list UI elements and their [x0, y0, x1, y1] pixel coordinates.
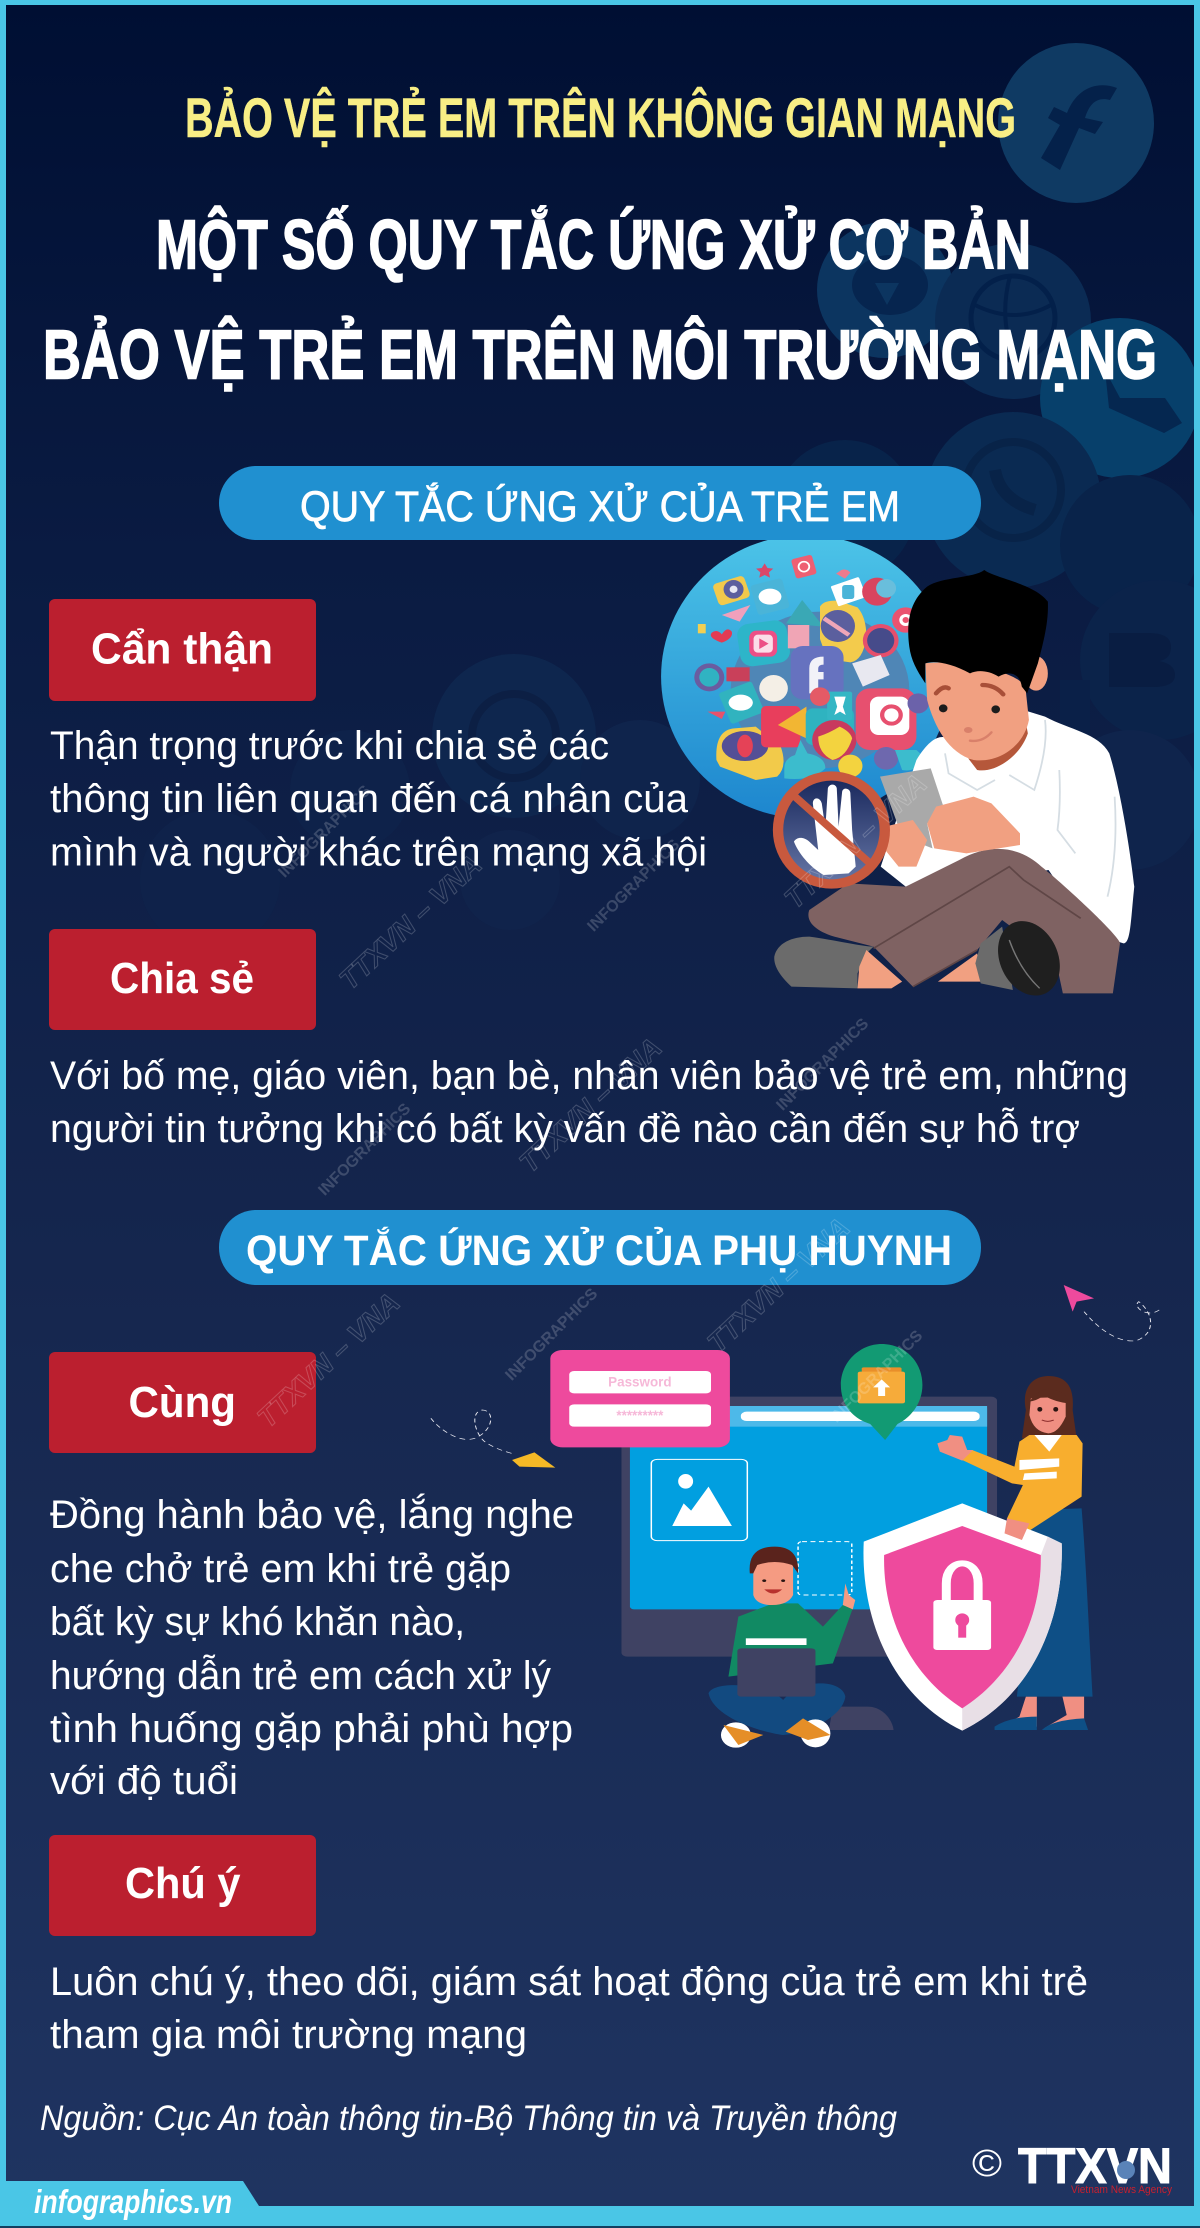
dashed placeholder — [798, 1542, 852, 1595]
label: Cẩn thận — [91, 624, 273, 674]
paper plane: pink — [1064, 1285, 1161, 1341]
password panel — [550, 1350, 730, 1447]
watermarks: TTXVN – VNA — [333, 849, 488, 995]
left shoe — [774, 937, 874, 988]
panel: Chú ý — [49, 1835, 1088, 2057]
background social icons — [432, 43, 1194, 790]
social bubble — [661, 535, 950, 818]
watermarks: INFOGRAPHICS — [315, 1100, 414, 1199]
shirt — [881, 710, 1134, 943]
label — [49, 599, 316, 701]
body text: bất kỳ sự khó khăn nào, — [50, 1600, 465, 1644]
body text — [50, 1054, 1128, 1151]
ear — [1024, 656, 1048, 691]
section pill: parents: QUY TẮC ỨNG XỬ CỦA PHỤ HUYNH — [246, 1226, 952, 1275]
woman — [937, 1376, 1093, 1730]
feet — [857, 950, 982, 988]
paper plane: yellow — [431, 1410, 555, 1468]
watermarks: TTXVN – VNA — [513, 1032, 668, 1178]
label — [49, 1352, 316, 1453]
boy with laptop — [709, 1547, 855, 1748]
hands — [882, 797, 1020, 867]
icon: shield with lock — [863, 1503, 1062, 1731]
body text: che chở trẻ em khi trẻ gặp — [50, 1547, 511, 1591]
label — [49, 929, 316, 1030]
facial features — [936, 685, 1003, 741]
body text — [50, 724, 707, 874]
icon: stop hand — [773, 771, 890, 889]
watermarks: INFOGRAPHICS — [275, 782, 374, 881]
watermarks: INFOGRAPHICS — [584, 836, 683, 935]
label: Chú ý — [125, 1859, 241, 1908]
section pill: parents — [219, 1210, 981, 1285]
footer tab: infographics.vn — [34, 2183, 232, 2220]
watermarks: TTXVN – VNA — [778, 768, 933, 914]
panel: Cẩn thận — [49, 599, 707, 874]
body text: Luôn chú ý, theo dõi, giám sát hoạt động của trẻ em khi trẻ — [50, 1960, 1088, 2004]
phone — [880, 768, 947, 848]
illustration: parent and child with security shield — [431, 1285, 1161, 1748]
body text: hướng dẫn trẻ em cách xử lý — [50, 1653, 551, 1698]
body text: tình huống gặp phải phù hợp — [50, 1707, 573, 1751]
hair — [908, 570, 1048, 693]
watermarks: INFOGRAPHICS — [827, 1327, 926, 1426]
label: Chia sẻ — [110, 954, 254, 1003]
TTXVN logo: TTXVN — [1018, 2138, 1172, 2194]
section pill: children — [219, 466, 981, 540]
body text: với độ tuổi — [50, 1759, 238, 1803]
label — [49, 1835, 316, 1936]
right shoe — [975, 913, 1070, 1004]
body text: mình và người khác trên mạng xã hội — [50, 830, 707, 874]
icon: image frame — [651, 1459, 747, 1541]
shirt folds — [945, 720, 1116, 897]
body text: Đồng hành bảo vệ, lắng nghe — [50, 1492, 574, 1537]
watermarks — [251, 768, 933, 1433]
watermarks: TTXVN – VNA — [251, 1287, 406, 1433]
icon: upload pin — [841, 1344, 922, 1440]
body text — [50, 1960, 1088, 2057]
panel: Cùng — [49, 1352, 574, 1803]
body text — [50, 1492, 574, 1803]
body text: người tin tưởng khi có bất kỳ vấn đề nào cần đến sự hỗ trợ — [50, 1106, 1080, 1151]
woman's hand on shield — [1005, 1518, 1029, 1540]
watermarks: INFOGRAPHICS — [502, 1285, 601, 1384]
pants — [808, 849, 1120, 993]
face — [925, 663, 1029, 760]
monitor — [621, 1397, 997, 1730]
TTXVN logo: © — [972, 2143, 1002, 2185]
title — [43, 86, 1157, 394]
password panel: Password — [608, 1374, 672, 1389]
body text: tham gia môi trường mạng — [50, 2013, 527, 2057]
watermarks: INFOGRAPHICS — [773, 1015, 872, 1114]
illustration: boy with phone and social media bubble — [661, 535, 1134, 1004]
watermarks: TTXVN – VNA — [701, 1212, 856, 1358]
body text: Với bố mẹ, giáo viên, bạn bè, nhân viên bảo vệ trẻ em, những — [50, 1054, 1128, 1098]
body text: Thận trọng trước khi chia sẻ các — [50, 724, 609, 768]
panel: Chia sẻ — [49, 929, 1128, 1151]
body text: thông tin liên quan đến cá nhân của — [50, 777, 689, 821]
TTXVN logo: Vietnam News Agency — [1071, 2184, 1172, 2196]
pants folds — [874, 867, 1081, 987]
social app icons — [694, 554, 929, 780]
section pill: children: QUY TẮC ỨNG XỬ CỦA TRẺ EM — [300, 482, 900, 531]
collar shadow — [968, 720, 1028, 770]
source note: Nguồn: Cục An toàn thông tin-Bộ Thông tin và Truyền thông — [40, 2099, 897, 2138]
password panel: ********* — [616, 1408, 664, 1423]
label: Cùng — [128, 1378, 236, 1427]
